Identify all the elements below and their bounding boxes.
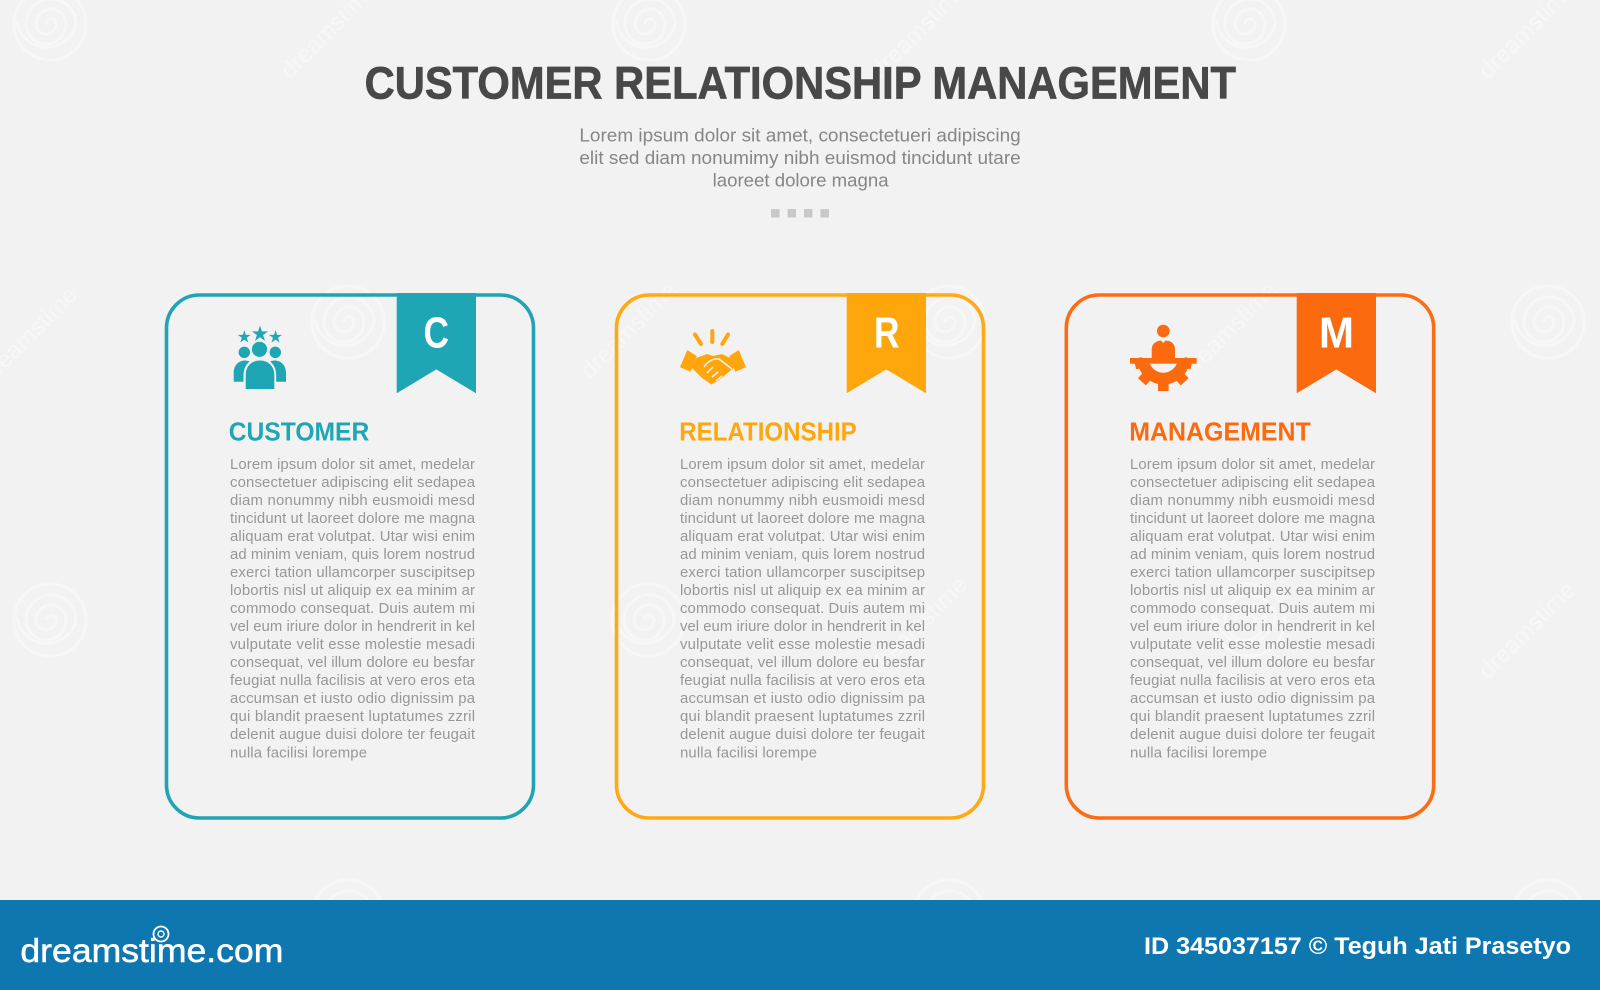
card outline relationship <box>616 295 984 818</box>
body text relationship: vel eum iriure dolor in hendrerit in kel <box>680 619 925 635</box>
body text relationship: delenit augue duisi dolore ter feugait <box>680 727 926 743</box>
body text customer: Lorem ipsum dolor sit amet, medelar <box>230 457 475 473</box>
body text relationship: consectetuer adipiscing elit sedapea <box>680 475 926 491</box>
body text relationship: consequat, vel illum dolore eu besfar <box>680 655 925 671</box>
body text management: commodo consequat. Duis autem mi <box>1130 601 1375 617</box>
ribbon R: R <box>874 308 900 357</box>
body text relationship: diam nonummy nibh eusmoidi mesd <box>680 493 925 509</box>
body text relationship: feugiat nulla facilisis at vero eros eta <box>680 673 926 689</box>
body text relationship <box>680 457 926 761</box>
icon: person on gear <box>1130 325 1197 391</box>
body text relationship: vulputate velit esse molestie mesadi <box>680 637 925 653</box>
body text customer: tincidunt ut laoreet dolore me magna <box>230 511 476 527</box>
body text customer <box>230 457 476 761</box>
body text management: tincidunt ut laoreet dolore me magna <box>1130 511 1376 527</box>
body text management: vel eum iriure dolor in hendrerit in kel <box>1130 619 1375 635</box>
body text customer: diam nonummy nibh eusmoidi mesd <box>230 493 475 509</box>
body text management <box>1130 457 1376 761</box>
body text management: exerci tation ullamcorper suscipitsep <box>1130 565 1375 581</box>
body text relationship: Lorem ipsum dolor sit amet, medelar <box>680 457 925 473</box>
body text relationship: ad minim veniam, quis lorem nostrud <box>680 547 925 563</box>
ribbon M: M <box>1319 308 1354 357</box>
body text customer: accumsan et iusto odio dignissim pa <box>230 691 476 707</box>
body text relationship: nulla facilisi lorempe <box>680 745 817 761</box>
body text customer: vel eum iriure dolor in hendrerit in kel <box>230 619 475 635</box>
heading relationship: RELATIONSHIP <box>679 418 857 446</box>
body text relationship: aliquam erat volutpat. Utar wisi enim <box>680 529 925 545</box>
body text management: accumsan et iusto odio dignissim pa <box>1130 691 1376 707</box>
body text customer: consectetuer adipiscing elit sedapea <box>230 475 476 491</box>
footer bar <box>0 900 1600 990</box>
divider dots <box>771 209 829 218</box>
body text customer: feugiat nulla facilisis at vero eros eta <box>230 673 476 689</box>
panel: relationship <box>616 293 984 818</box>
watermark pattern: dreamstime <box>1175 276 1283 384</box>
body text customer: aliquam erat volutpat. Utar wisi enim <box>230 529 475 545</box>
body text customer: ad minim veniam, quis lorem nostrud <box>230 547 475 563</box>
subtitle: Lorem ipsum dolor sit amet, consectetueri adipiscing <box>579 124 1021 146</box>
body text customer: commodo consequat. Duis autem mi <box>230 601 475 617</box>
body text relationship: accumsan et iusto odio dignissim pa <box>680 691 926 707</box>
subtitle: laoreet dolore magna <box>713 170 889 190</box>
card outline customer <box>166 295 534 818</box>
body text customer: vulputate velit esse molestie mesadi <box>230 637 475 653</box>
watermark pattern: dreamstime <box>575 276 683 384</box>
subtitle <box>579 124 1021 190</box>
footer credit: ID 345037157 © Teguh Jati Prasetyo <box>1144 933 1571 960</box>
body text relationship: commodo consequat. Duis autem mi <box>680 601 925 617</box>
body text management: consectetuer adipiscing elit sedapea <box>1130 475 1376 491</box>
body text customer: qui blandit praesent luptatumes zzril <box>230 709 475 725</box>
ribbon R <box>847 293 926 393</box>
body text relationship: qui blandit praesent luptatumes zzril <box>680 709 925 725</box>
body text management: nulla facilisi lorempe <box>1130 745 1267 761</box>
body text management: diam nonummy nibh eusmoidi mesd <box>1130 493 1375 509</box>
heading management: MANAGEMENT <box>1129 418 1311 446</box>
ribbon C <box>397 293 476 393</box>
body text management: vulputate velit esse molestie mesadi <box>1130 637 1375 653</box>
title: CUSTOMER RELATIONSHIP MANAGEMENT <box>365 58 1236 109</box>
panel: customer <box>166 293 534 818</box>
body text management: ad minim veniam, quis lorem nostrud <box>1130 547 1375 563</box>
ribbon M <box>1297 293 1376 393</box>
body text customer: lobortis nisl ut aliquip ex ea minim ar <box>230 583 475 599</box>
icon: handshake <box>680 331 746 384</box>
body text relationship: tincidunt ut laoreet dolore me magna <box>680 511 926 527</box>
watermark pattern: dreamstime <box>1473 576 1581 684</box>
card outline management <box>1066 295 1434 818</box>
body text relationship: exerci tation ullamcorper suscipitsep <box>680 565 925 581</box>
watermark pattern: dreamstime <box>865 571 973 679</box>
panel: management <box>1066 293 1434 818</box>
body text customer: consequat, vel illum dolore eu besfar <box>230 655 475 671</box>
body text customer: nulla facilisi lorempe <box>230 745 367 761</box>
body text customer: delenit augue duisi dolore ter feugait <box>230 727 476 743</box>
body text management: aliquam erat volutpat. Utar wisi enim <box>1130 529 1375 545</box>
heading customer: CUSTOMER <box>229 418 369 446</box>
subtitle: elit sed diam nonumimy nibh euismod tincidunt utare <box>579 147 1021 168</box>
body text management: lobortis nisl ut aliquip ex ea minim ar <box>1130 583 1375 599</box>
body text management: consequat, vel illum dolore eu besfar <box>1130 655 1375 671</box>
ribbon C: C <box>424 308 449 357</box>
body text relationship: lobortis nisl ut aliquip ex ea minim ar <box>680 583 925 599</box>
body text management: qui blandit praesent luptatumes zzril <box>1130 709 1375 725</box>
icon: team with stars <box>234 326 286 389</box>
footer logo: dreamstime.com <box>20 932 283 969</box>
body text management: Lorem ipsum dolor sit amet, medelar <box>1130 457 1375 473</box>
body text management: delenit augue duisi dolore ter feugait <box>1130 727 1376 743</box>
body text customer: exerci tation ullamcorper suscipitsep <box>230 565 475 581</box>
body text management: feugiat nulla facilisis at vero eros eta <box>1130 673 1376 689</box>
